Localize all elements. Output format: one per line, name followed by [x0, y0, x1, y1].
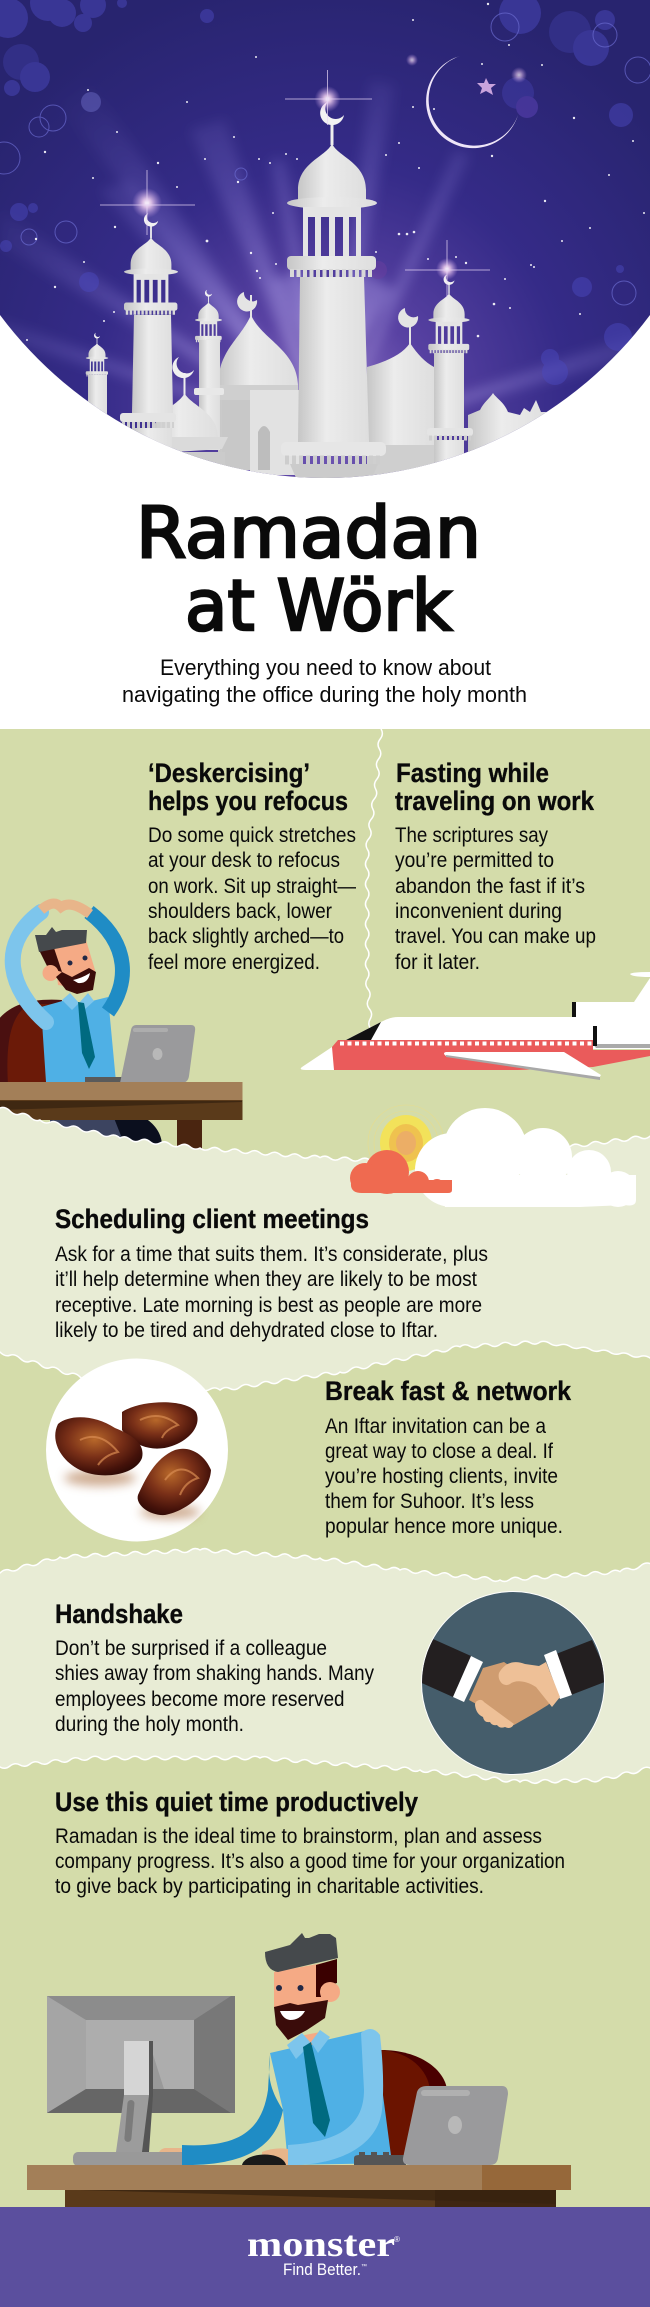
- text block: deskercising: on work. Sit up straight—: [148, 874, 356, 898]
- illustration: sun and clouds: [350, 1105, 636, 1207]
- monster logo: ™: [361, 2263, 367, 2270]
- text block: fasting while traveling: traveling on work: [395, 786, 595, 816]
- text block: break fast and network: great way to close a deal. If: [325, 1439, 553, 1463]
- title: [136, 492, 481, 647]
- flares on minaret crescents: [100, 70, 490, 298]
- text block: deskercising: at your desk to refocus: [148, 848, 340, 872]
- subtitle: Everything you need to know about: [160, 655, 491, 680]
- green background band: [0, 729, 650, 2207]
- text block: scheduling client meetings: it’ll help determine when they are likely to be most: [55, 1267, 477, 1291]
- left hand: [158, 2148, 188, 2166]
- header illustration: night sky and mosque: [0, 0, 650, 480]
- text block: scheduling client meetings: [55, 1204, 488, 1342]
- main minaret: [281, 102, 386, 478]
- near sleeve: [288, 2029, 383, 2165]
- text block: fasting while traveling: Fasting while: [396, 758, 549, 788]
- monster logo: ®: [394, 2235, 400, 2244]
- bokeh circles: [0, 0, 633, 385]
- text block: break fast and network: popular hence more unique.: [325, 1514, 563, 1538]
- text block: fasting while traveling: abandon the fast if it’s: [395, 874, 585, 898]
- title: at Wörk: [185, 565, 452, 647]
- handshake icon: [415, 1592, 610, 1774]
- text block: deskercising: shoulders back, lower: [148, 899, 332, 923]
- illustration: man stretching at desk: [0, 904, 242, 1150]
- stars: [26, 3, 645, 341]
- text block: break fast and network: An Iftar invitation can be a: [325, 1414, 546, 1438]
- text block: deskercising: helps you refocus: [148, 786, 348, 816]
- text block: deskercising: [148, 758, 356, 974]
- text block: handshake: Don’t be surprised if a colleague: [55, 1636, 327, 1660]
- left minaret: [120, 213, 178, 470]
- monster logo: [247, 2224, 400, 2279]
- subtitle: [122, 655, 527, 707]
- crescent moon and star: [406, 54, 527, 148]
- text block: deskercising: back slightly arched—to: [148, 924, 344, 948]
- white cloud: [415, 1108, 636, 1207]
- text block: use this quiet time: to give back by participating in charitable activities.: [55, 1874, 484, 1898]
- text block: handshake: [55, 1599, 374, 1736]
- text block: scheduling client meetings: Scheduling client meetings: [55, 1204, 369, 1234]
- laptop: [85, 1077, 122, 1084]
- text block: handshake: employees become more reserved: [55, 1687, 344, 1711]
- subtitle: navigating the office during the holy month: [122, 682, 527, 707]
- text block: break fast and network: you’re hosting clients, invite: [325, 1464, 558, 1488]
- text block: scheduling client meetings: receptive. Late morning is best as people are more: [55, 1293, 482, 1317]
- title: Ramadan: [136, 492, 481, 574]
- head: [274, 1963, 325, 2034]
- text block: handshake: during the holy month.: [55, 1712, 244, 1736]
- laptop: [403, 2086, 508, 2165]
- near hand and mouse: [262, 2148, 288, 2165]
- text block: handshake: Handshake: [55, 1599, 183, 1629]
- text block: use this quiet time: Use this quiet time productively: [55, 1787, 418, 1817]
- legs: [50, 1118, 125, 1140]
- text block: fasting while traveling: for it later.: [395, 950, 480, 974]
- text block: fasting while traveling: [395, 758, 596, 974]
- collar and tie: [62, 993, 94, 1010]
- small minarets: [86, 290, 224, 450]
- dates: [55, 1402, 211, 1515]
- far arm: [182, 2055, 283, 2165]
- footer band: [0, 2207, 650, 2307]
- dates image circle: [46, 1358, 228, 1542]
- far buildings: [218, 315, 551, 470]
- text block: scheduling client meetings: Ask for a time that suits them. It’s considerate, plus: [55, 1242, 488, 1266]
- text block: use this quiet time: Ramadan is the ideal time to brainstorm, plan and assess: [55, 1824, 542, 1848]
- text block: deskercising: ‘Deskercising’: [148, 758, 310, 788]
- right minaret: [427, 275, 473, 476]
- desk: [65, 2190, 556, 2207]
- domes trim: [218, 292, 434, 475]
- shirt: [41, 997, 116, 1082]
- monitor base: [73, 2152, 189, 2166]
- text block: scheduling client meetings: likely to be tired and dehydrated close to Iftar.: [55, 1318, 438, 1342]
- head: [54, 940, 95, 990]
- text block: fasting while traveling: travel. You can make up: [395, 924, 596, 948]
- keyboard: [354, 2152, 406, 2165]
- arms: [89, 912, 122, 1012]
- text block: break fast and network: [325, 1376, 572, 1538]
- text block: deskercising: feel more energized.: [148, 950, 320, 974]
- text block: fasting while traveling: The scriptures say: [395, 823, 548, 847]
- bokeh rings: [0, 13, 650, 305]
- desk: [177, 1118, 202, 1150]
- illustration: airplane: [301, 972, 650, 1080]
- light rays: [10, 87, 622, 408]
- date shadows: [64, 1470, 200, 1519]
- collar and tie: [300, 2032, 320, 2045]
- text block: deskercising: Do some quick stretches: [148, 823, 356, 847]
- monster logo: Find Better.: [283, 2260, 361, 2279]
- text block: handshake: shies away from shaking hands. Many: [55, 1661, 374, 1685]
- light section: handshake: [0, 1548, 650, 1783]
- date highlights: [80, 1416, 198, 1495]
- front dome: [150, 357, 228, 475]
- text block: fasting while traveling: inconvenient during: [395, 899, 562, 923]
- text block: fasting while traveling: you’re permitted to: [395, 848, 554, 872]
- text block: break fast and network: Break fast & network: [325, 1376, 572, 1406]
- orange cloud: [350, 1150, 452, 1194]
- text block: use this quiet time: company progress. It’s also a good time for your organization: [55, 1849, 565, 1873]
- shirt: [270, 2030, 392, 2165]
- chair: [381, 2050, 447, 2157]
- illustration: man at computer: [27, 1933, 571, 2207]
- light section: scheduling: [0, 1104, 650, 1391]
- text block: use this quiet time: [55, 1787, 565, 1898]
- monster logo: monster: [247, 2224, 395, 2264]
- text block: break fast and network: them for Suhoor. It’s less: [325, 1489, 534, 1513]
- wavy column divider: [365, 729, 382, 1029]
- chair: [0, 1000, 62, 1085]
- monitor: [47, 1996, 235, 2152]
